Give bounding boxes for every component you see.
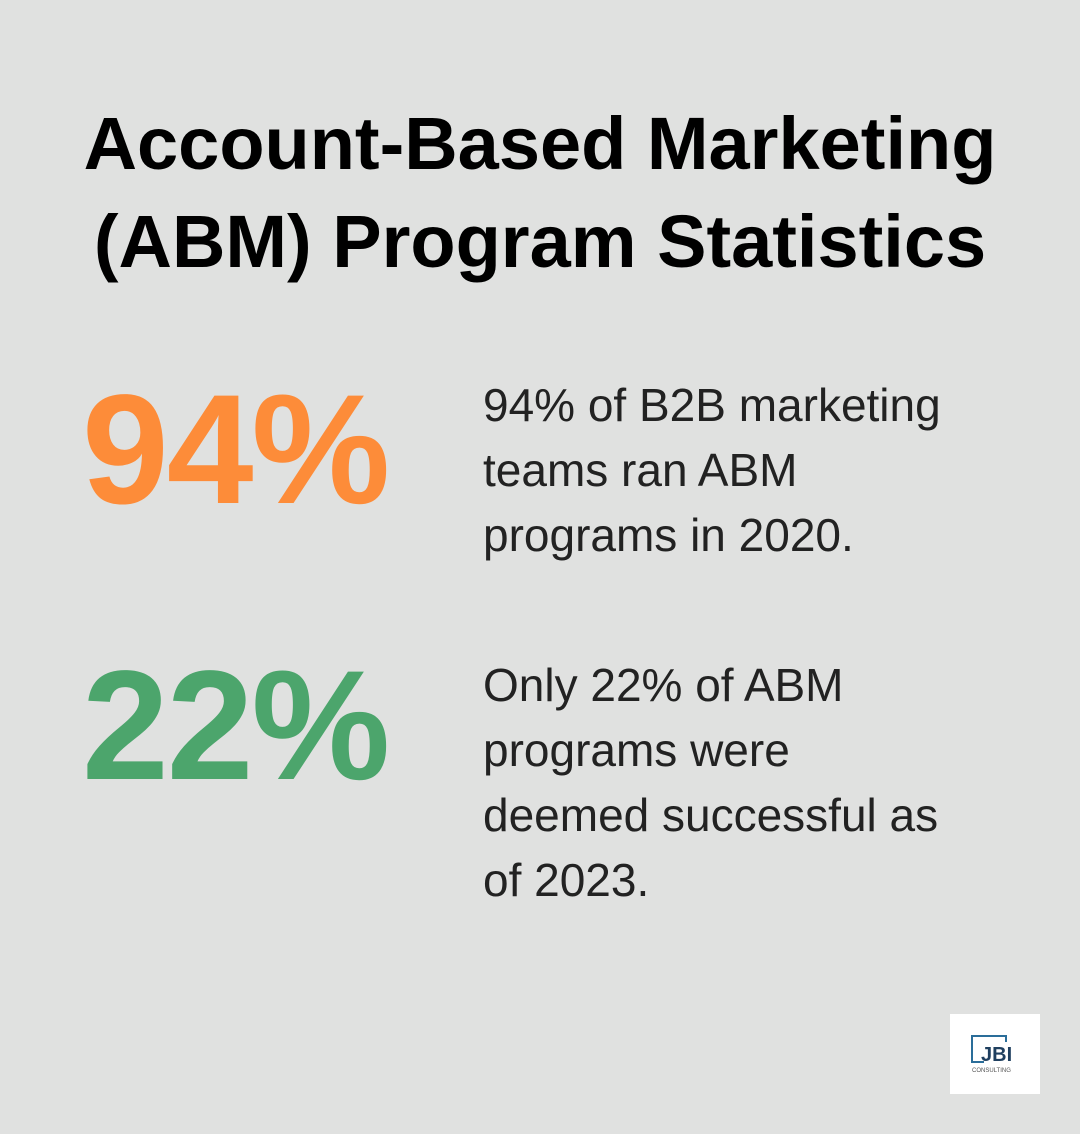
logo: JBI Consulting: CONSULTING <box>972 1068 1011 1074</box>
stat: 22% number: 22% <box>82 639 388 813</box>
stat: 22% description: programs were <box>483 724 790 776</box>
stat: 94% description: teams ran ABM <box>483 444 797 496</box>
logo: JBI Consulting <box>950 1014 1040 1094</box>
stat: 22% description <box>483 659 938 906</box>
stat: 94% description: 94% of B2B marketing <box>483 379 941 431</box>
title: Account-Based Marketing <box>84 102 996 185</box>
title: (ABM) Program Statistics <box>94 200 986 283</box>
title <box>84 102 996 283</box>
stat: 94% description: programs in 2020. <box>483 509 854 561</box>
logo: JBI Consulting: JBI <box>981 1044 1012 1066</box>
stat: 22% description: deemed successful as <box>483 789 938 841</box>
stat: 94% number: 94% <box>82 363 388 537</box>
stat: 22% description: of 2023. <box>483 854 649 906</box>
stat: 22% description: Only 22% of ABM <box>483 659 844 711</box>
stat: 94% description <box>483 379 941 561</box>
